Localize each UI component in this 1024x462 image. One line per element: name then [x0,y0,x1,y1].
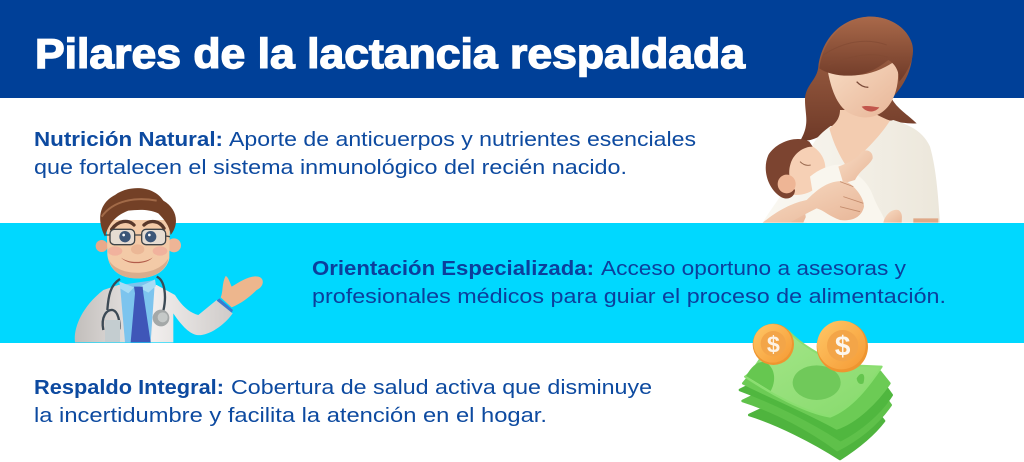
text block: respaldo integral [34,376,652,427]
text block: orientación especializada [312,257,946,308]
cyan band [0,223,1024,343]
text block: orientación especializada: Acceso oportuno a asesoras y [601,257,907,280]
text block: respaldo integral: la incertidumbre y facilita la atención en el hogar. [34,404,547,427]
text block: orientación especializada: Orientación Especializada: [312,257,594,280]
illustration: stack of money with coins: $ [835,331,851,362]
header band [0,0,1024,98]
illustration: stack of money with coins: $ [767,331,780,357]
text block: nutrición natural: Aporte de anticuerpos y nutrientes esenciales [229,128,696,151]
text block: orientación especializada: profesionales médicos para guiar el proceso de alimentación. [312,285,946,308]
illustration: stack of money with coins [740,321,892,459]
title: Pilares de la lactancia respaldada [35,30,746,77]
illustration: mother holding baby [763,17,940,223]
text block: nutrición natural: Nutrición Natural: [34,128,223,151]
text block: respaldo integral: Respaldo Integral: [34,376,224,399]
text block: nutrición natural: que fortalecen el sistema inmunológico del recién nacido. [34,156,627,179]
text block: respaldo integral: Cobertura de salud activa que disminuye [231,376,652,399]
illustration: doctor [75,188,263,342]
text block: nutrición natural [34,128,696,179]
